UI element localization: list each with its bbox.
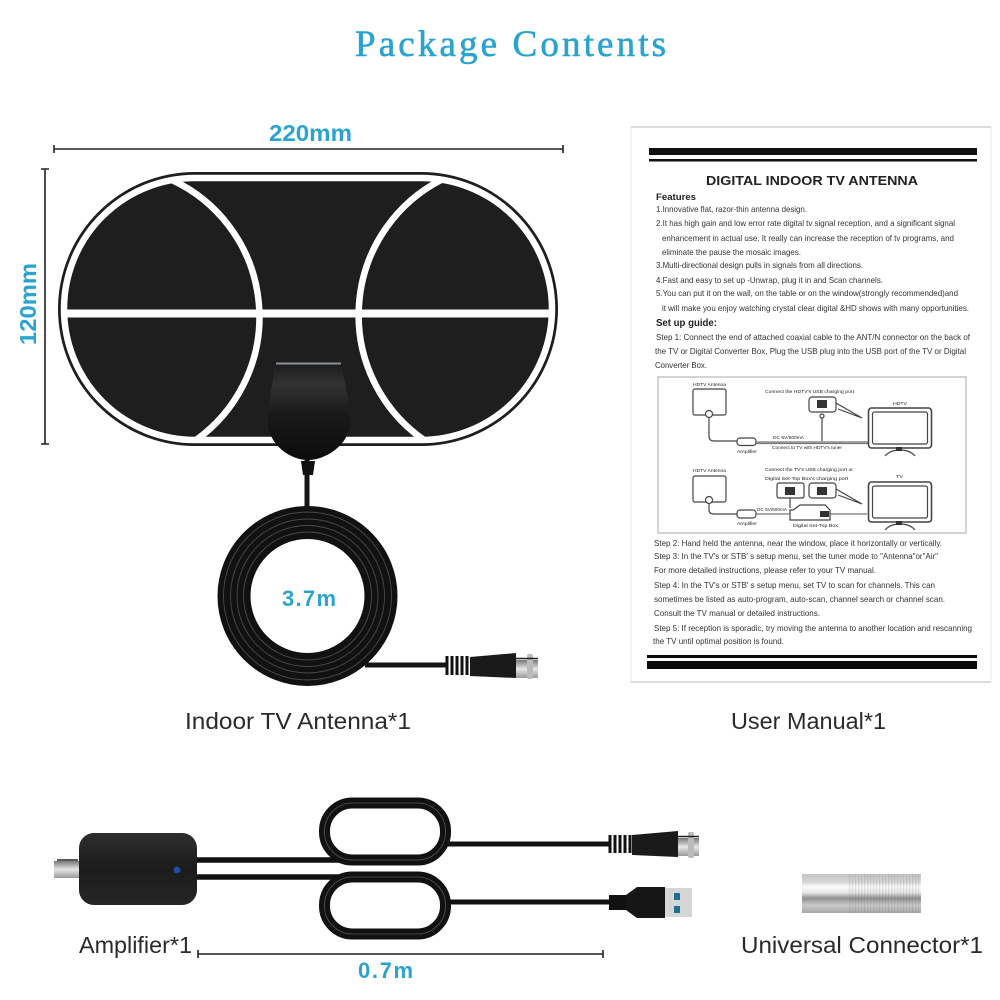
manual wiring diagram: DC 5V/500mA xyxy=(757,507,788,512)
manual wiring diagram: TV xyxy=(896,474,904,479)
manual wiring diagram: Amplifier xyxy=(737,521,758,526)
manual remaining steps text: sometimes be listed as auto-program, auto-scan, channel search or channel scan. xyxy=(654,595,945,604)
amplifier LED xyxy=(174,867,180,873)
amplifier port xyxy=(54,860,79,878)
amplifier body xyxy=(79,833,197,905)
antenna coaxial cable xyxy=(224,460,446,680)
title: Package Contents xyxy=(355,24,666,65)
manual wiring diagram: Digital Set-Top Box's charging port xyxy=(765,476,849,481)
manual setup guide text xyxy=(655,318,971,370)
manual wiring diagram: HDTV Antenna xyxy=(693,468,726,473)
cable length dimension: 0.7m xyxy=(198,950,603,983)
manual setup guide text: Set up guide: xyxy=(656,318,717,329)
manual features text xyxy=(656,192,969,313)
manual remaining steps text: the TV until optimal position is found. xyxy=(653,637,784,646)
height dimension: 120mm: 120mm xyxy=(15,263,41,345)
cable loops xyxy=(195,803,610,934)
manual features text: eliminate the pause the mosaic images. xyxy=(662,248,801,257)
manual bottom rules xyxy=(647,655,977,669)
label: amplifier: Amplifier*1 xyxy=(79,932,192,958)
manual remaining steps text: Step 3: In the TV's or STB' s setup menu, set the tuner mode to "Antenna"or"Air" xyxy=(654,552,938,561)
manual top rules xyxy=(649,148,977,162)
manual remaining steps text: Step 5: If reception is sporadic, try moving the antenna to another location and rescanning xyxy=(654,624,972,633)
manual title: DIGITAL INDOOR TV ANTENNA xyxy=(706,173,919,188)
manual features text: enhancement in actual use. It really can increase the reception of tv programs, and xyxy=(662,234,954,243)
height dimension: 120mm xyxy=(15,169,49,444)
coaxial plug xyxy=(610,831,699,858)
manual wiring diagram: DC 5V/500mA xyxy=(773,435,805,440)
antenna amplifier pod xyxy=(268,362,350,460)
manual wiring diagram: Amplifier xyxy=(737,449,758,454)
manual features text: 3.Multi-directional design pulls in signals from all directions. xyxy=(656,261,863,270)
manual wiring diagram: Connect the TV's USB charging port or xyxy=(765,467,854,472)
manual wiring diagram: HDTV xyxy=(893,401,908,406)
manual features text: 1.Innovative flat, razor-thin antenna design. xyxy=(656,205,807,214)
manual remaining steps text: Consult the TV manual or detailed instructions. xyxy=(654,609,820,618)
label: user manual: User Manual*1 xyxy=(731,708,886,734)
manual features text: Features xyxy=(656,192,696,203)
manual wiring diagram xyxy=(658,377,966,533)
manual wiring diagram: Digital Set-Top Box xyxy=(793,523,839,528)
manual wiring diagram: Connect to TV with HDTV's tuner xyxy=(772,445,842,450)
manual wiring diagram: HDTV Antenna xyxy=(693,382,726,387)
manual features text: 2.It has high gain and low error rate digital tv signal reception, and a significant signal xyxy=(656,219,955,228)
manual setup guide text: the TV or Digital Converter Box, Plug the USB plug into the USB port of the TV or Digital xyxy=(655,347,966,356)
label: universal connector: Universal Connector*1 xyxy=(741,932,983,958)
manual features text: 4.Fast and easy to set up -Unwrap, plug it in and Scan channels. xyxy=(656,276,883,285)
label: indoor TV antenna: Indoor TV Antenna*1 xyxy=(185,708,411,734)
USB plug xyxy=(609,887,692,918)
manual remaining steps text: For more detailed instructions, please refer to your TV manual. xyxy=(654,566,876,575)
manual setup guide text: Converter Box. xyxy=(655,361,707,370)
width dimension: 220mm xyxy=(54,120,563,153)
antenna flat panel xyxy=(58,172,558,446)
amplifier with cables xyxy=(54,803,699,934)
cable length dimension: 0.7m: 0.7m xyxy=(358,958,413,983)
panel: user manual xyxy=(631,127,991,682)
manual features text: 5.You can put it on the wall, on the table or on the window(strongly recommended)and xyxy=(656,289,958,298)
manual setup guide text: Step 1: Connect the end of attached coaxial cable to the ANT/N connector on the back of xyxy=(656,333,971,342)
universal connector xyxy=(802,874,921,913)
antenna F connector xyxy=(447,653,538,679)
manual features text: it will make you enjoy watching crystal clear digital &HD shows with many opportunities. xyxy=(662,304,969,313)
manual wiring diagram: Connect the HDTV's USB charging port xyxy=(765,389,855,394)
manual remaining steps text xyxy=(653,539,972,646)
width dimension: 220mm: 220mm xyxy=(269,120,352,146)
cable length label: 3.7m: 3.7m xyxy=(282,586,336,611)
antenna xyxy=(58,172,558,680)
manual remaining steps text: Step 2: Hand held the antenna, near the window, place it horizontally or vertically. xyxy=(654,539,942,548)
manual remaining steps text: Step 4: In the TV's or STB' s setup menu, set TV to scan for channels. This can xyxy=(654,581,935,590)
